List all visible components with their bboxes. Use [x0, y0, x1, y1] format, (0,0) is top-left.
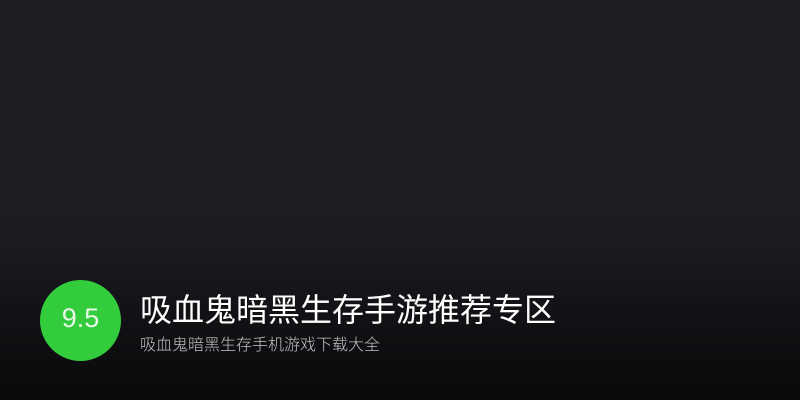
title: 吸血鬼暗黑生存手游推荐专区 [140, 285, 556, 331]
score badge: 9.5 [40, 280, 121, 361]
subtitle: 吸血鬼暗黑生存手机游戏下载大全 [140, 331, 380, 355]
score badge: 9.5: 9.5 [62, 303, 99, 333]
